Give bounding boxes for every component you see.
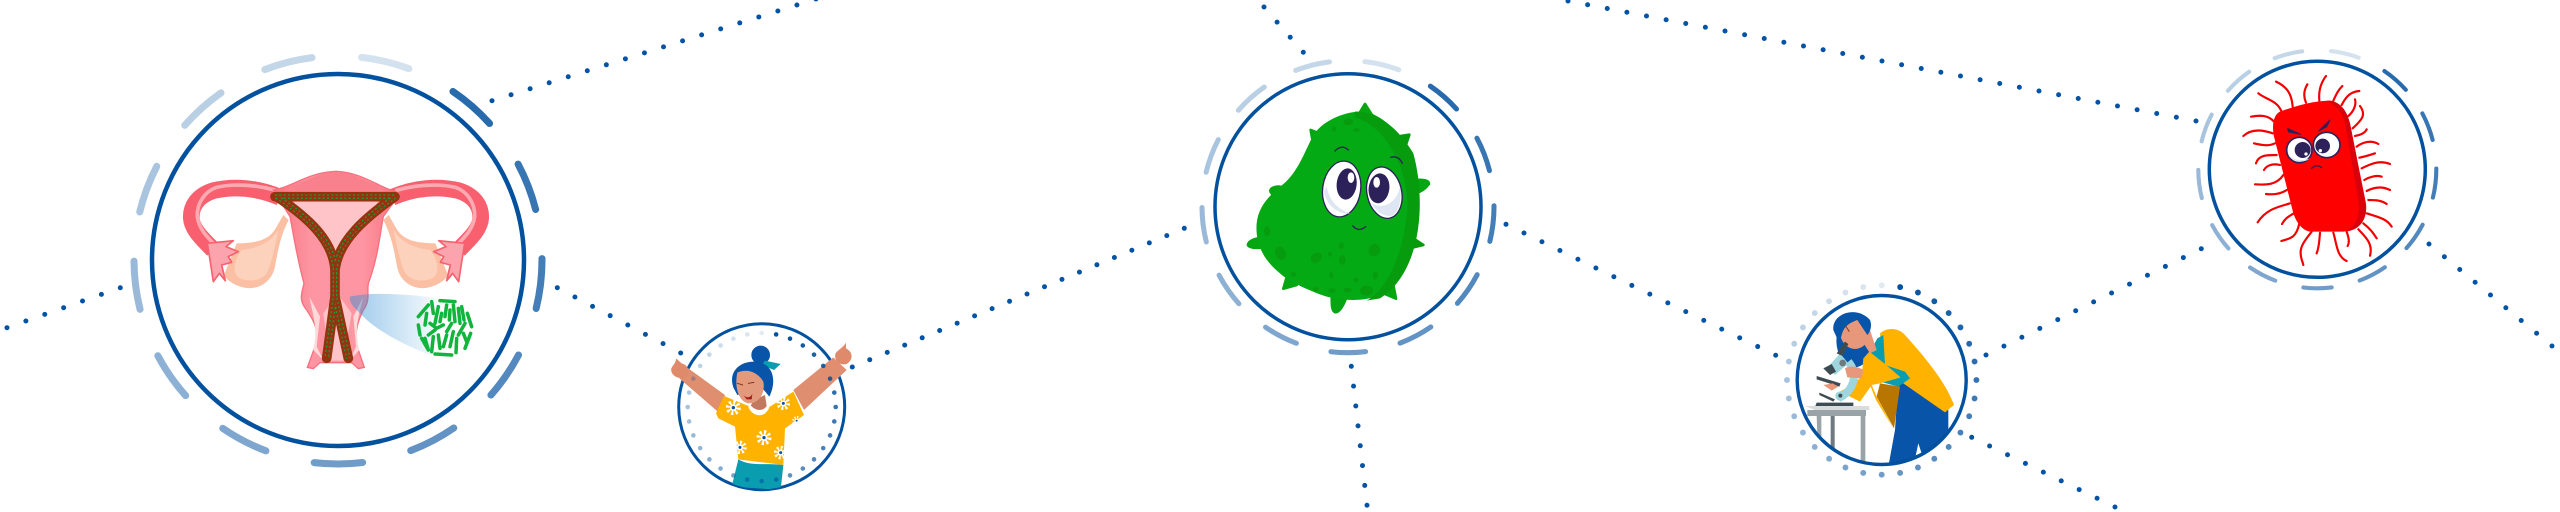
bacteria cluster [418,301,472,355]
panel: uterus node [134,56,542,464]
dot ring [685,331,838,483]
panel: red bacterium node [2198,50,2436,288]
icon: green microbe [1248,104,1429,312]
panel: scientist node [1784,282,1979,478]
flagella [2243,76,2392,265]
icon: red bacterium [2243,76,2392,265]
panel: green microbe node [1202,61,1494,353]
eyes [1319,159,1364,219]
magnifier cone [350,294,447,355]
microscope [1838,362,1854,398]
scientist ring [1797,296,1966,464]
eyes [2287,137,2312,163]
icon: uterus with bacteria [191,171,481,369]
dot ring [1784,282,1979,478]
Y-shaped infected band [275,197,395,358]
icon: cheering woman [671,343,852,490]
panel: happy woman node [671,324,852,490]
icon: scientist at microscope [1805,312,1954,467]
